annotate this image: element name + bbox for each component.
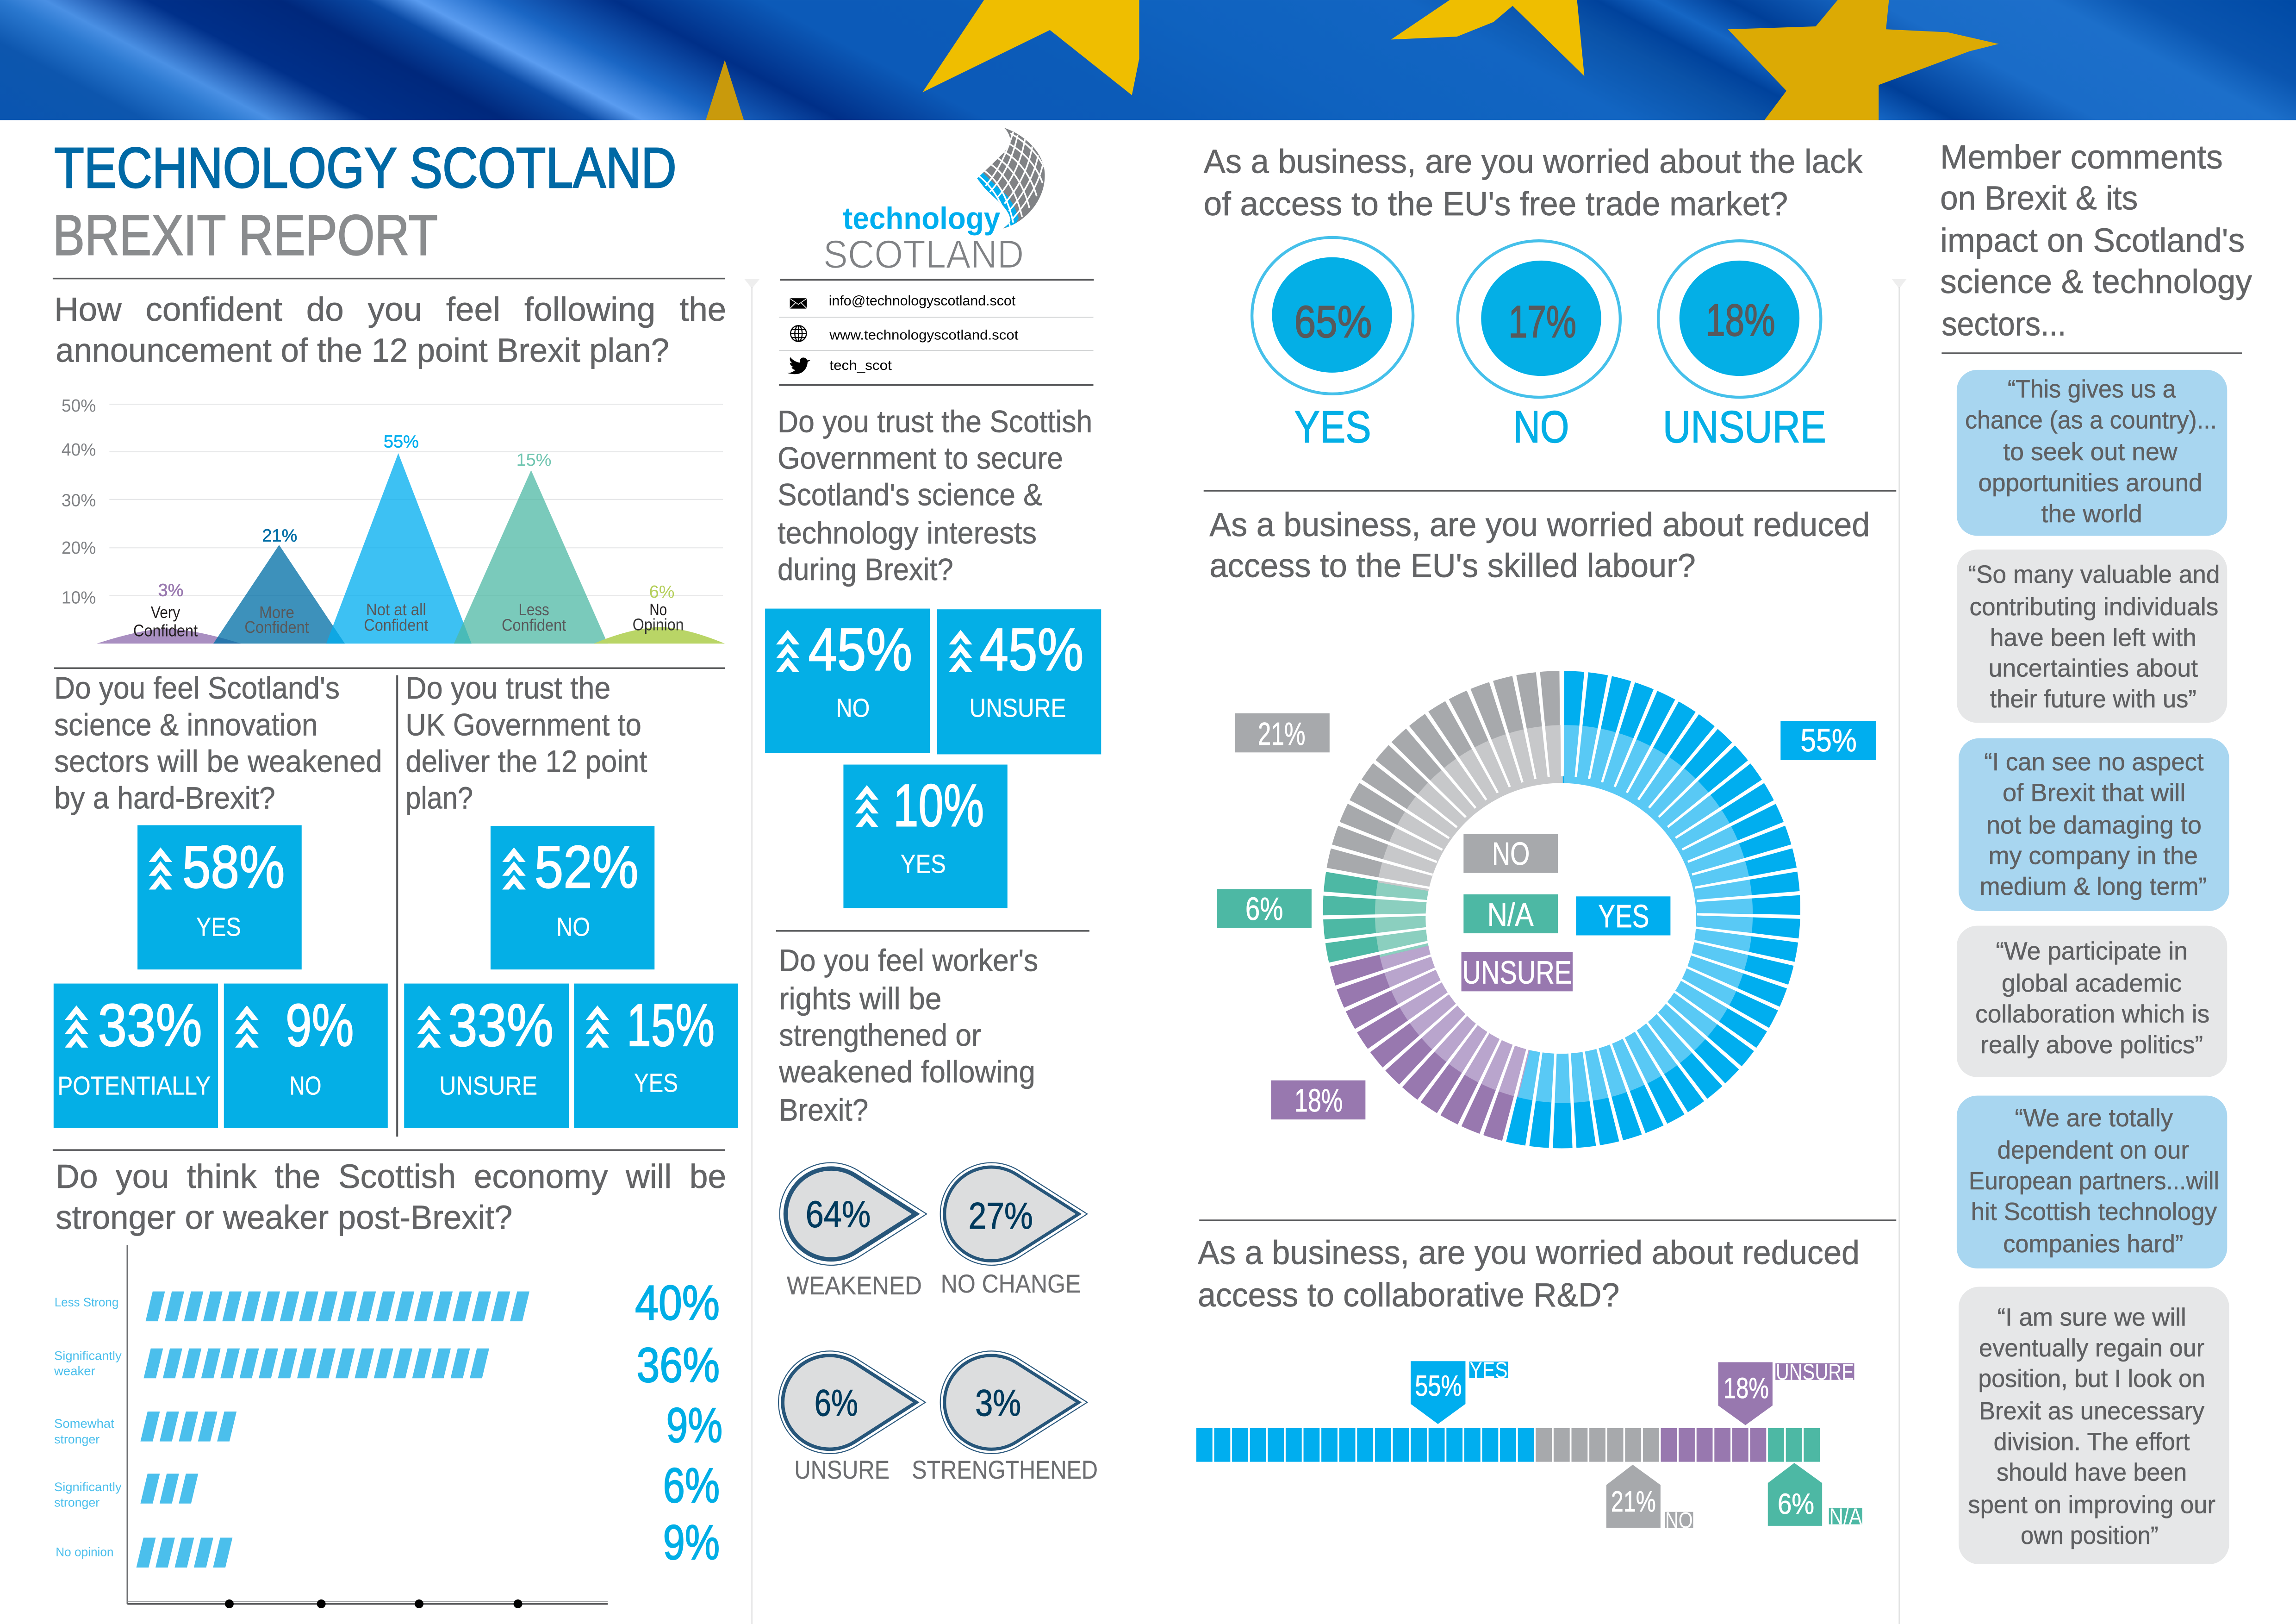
quote: European partners: European partners...will (1969, 1167, 2219, 1195)
chart: confidence triangles: No (649, 600, 667, 619)
heading: UK government question: plan? (405, 781, 473, 815)
chart: striped bars: stronger (54, 1432, 100, 1446)
heading: Scottish Government question: Scotland's science & (778, 478, 1043, 512)
stat: 45% unsure: UNSURE (970, 693, 1066, 723)
stat: 64% weakened: WEAKENED (787, 1271, 922, 1300)
quote: European partners: dependent on our (1997, 1137, 2189, 1164)
chart: confidence triangles (62, 396, 725, 643)
chart: confidence triangles: More (259, 603, 294, 622)
heading: skilled labour question: As a business, are you worried about reduced (1209, 506, 1870, 543)
heading: R&D question: access to collaborative R&D? (1198, 1276, 1619, 1314)
quote: valuable individuals: uncertainties about (1989, 655, 2198, 682)
stat: 17% no: 17% (1508, 296, 1576, 347)
chart: striped bars: No opinion (56, 1545, 114, 1559)
stat: 45% no: NO (836, 693, 870, 723)
icon: globe (790, 325, 806, 342)
stat: 33% potentially: POTENTIALLY (57, 1071, 211, 1101)
quote: global academic collaboration: “We participate in (1996, 937, 2188, 965)
stat: 9% no: NO (290, 1071, 321, 1101)
chart: striped bars: 9% (663, 1515, 720, 1570)
heading: confidence question: announcement of the 12 point Brexit plan? (56, 331, 669, 369)
marker: 18% unsure: 18% (1724, 1372, 1769, 1405)
heading: Scottish Government question: during Brexit? (778, 553, 953, 587)
heading: Scottish Government question: technology interests (778, 516, 1037, 550)
logo: technology scotland (823, 125, 1054, 277)
panel: collaborative R&D question (1196, 1234, 1862, 1533)
quote: chance as a country: chance (as a country)... (1965, 406, 2217, 434)
chart: confidence triangles: 20% (62, 538, 96, 558)
legend: no: NO (1492, 836, 1530, 872)
chart: confidence triangles: Very (151, 603, 180, 622)
chart: confidence triangles: Not at all (366, 600, 426, 619)
heading: economy question (56, 1158, 726, 1237)
heading: Scottish Government question: Government to secure (778, 441, 1063, 475)
quote: eventually regain position: division. The effort (1994, 1428, 2190, 1455)
text: contact lines: info@technologyscotland.scot (829, 294, 1016, 309)
chart: confidence triangles: 40% (62, 440, 96, 460)
heading: workers' rights question (778, 944, 1038, 1127)
quote: valuable individuals (1957, 550, 2227, 723)
quote: valuable individuals: their future with us” (1990, 685, 2196, 713)
heading: R&D question (1198, 1234, 1860, 1314)
stat: 15% yes: YES (634, 1068, 678, 1098)
panel: free trade market question (1204, 143, 1863, 452)
text: contact lines (829, 294, 1019, 373)
heading: workers' rights question: Brexit? (779, 1093, 868, 1127)
heading: member comments: science & technology (1940, 263, 2252, 300)
quote: chance as a country: “This gives us a (2008, 375, 2176, 403)
quote: European partners (1957, 1096, 2227, 1268)
stat: 15% yes: 15% (627, 992, 715, 1059)
stat: 64% weakened: 64% (806, 1193, 871, 1235)
quote: chance as a country: opportunities around (1978, 469, 2203, 497)
quote: eventually regain position: position, but I look on (1978, 1365, 2205, 1393)
quote: no aspect of Brexit: medium & long term” (1980, 873, 2207, 900)
heading: skilled labour question (1209, 506, 1870, 585)
quote: eventually regain position (1959, 1287, 2229, 1564)
stat: 65% yes (1252, 237, 1413, 452)
chart: confidence triangles: 6% (649, 582, 675, 602)
text: contact lines: www.technologyscotland.scot (829, 327, 1019, 343)
quote: no aspect of Brexit: not be damaging to (1986, 811, 2202, 839)
icon: twitter bird (787, 357, 810, 374)
quote: no aspect of Brexit: “I can see no aspect (1984, 748, 2204, 776)
heading: UK government question (405, 671, 647, 815)
heading: economy question: Do you think the Scottish economy will be (56, 1158, 726, 1195)
chart: confidence triangles: 15% (516, 450, 552, 470)
heading: UK government question: Do you trust the (405, 671, 610, 706)
label: 55% (1780, 721, 1876, 760)
marker: 18% unsure (1718, 1360, 1854, 1425)
quote: valuable individuals: “So many valuable and (1968, 561, 2220, 588)
chart: confidence triangles: Opinion (633, 615, 684, 634)
heading: workers' rights question: weakened following (778, 1055, 1035, 1089)
stat: 45% unsure: 45% (980, 616, 1083, 683)
heading: workers' rights question: rights will be (779, 982, 941, 1016)
panel: member comments (1940, 138, 2252, 1564)
panel: skilled labour question (1209, 506, 1876, 1119)
panel: Scottish economy question (54, 1158, 726, 1608)
stat: 3% strengthened (912, 1351, 1098, 1484)
chart: striped bars: Less Strong (55, 1295, 118, 1309)
chart: striped bars: Somewhat (54, 1417, 114, 1430)
legend: n/a (1463, 894, 1558, 933)
stat: 27% no change (940, 1163, 1087, 1298)
marker: 6% n/a: N/A (1829, 1504, 1862, 1529)
stat: 65% yes: YES (1294, 402, 1371, 452)
heading: confidence question: How confident do you feel following the (54, 291, 726, 328)
heading: member comments: sectors... (1941, 306, 2066, 343)
chart: striped bars: stronger (54, 1496, 100, 1510)
stat: 45% no (765, 609, 930, 753)
label: 6% (1217, 889, 1312, 928)
heading: member comments: Member comments (1940, 138, 2223, 176)
marker: 6% n/a (1768, 1463, 1862, 1529)
stat: 3% strengthened: STRENGTHENED (912, 1455, 1098, 1484)
marker: 18% unsure: UNSURE (1776, 1360, 1854, 1385)
stat: 18% unsure: 18% (1706, 295, 1775, 345)
heading: workers' rights question: strengthened or (779, 1018, 981, 1053)
quote: European partners: companies hard” (2003, 1230, 2183, 1258)
chart: striped bars: Significantly (54, 1349, 122, 1362)
label: 6%: 6% (1245, 891, 1283, 927)
stat: 10% yes: 10% (893, 772, 984, 839)
chart: striped bars: 40% (635, 1276, 720, 1330)
heading: member comments (1940, 138, 2252, 343)
chart: striped bars: 36% (636, 1338, 720, 1393)
heading: hard-Brexit question (54, 671, 382, 815)
chart: confidence triangles: 30% (62, 491, 96, 510)
stat: 52% no: 52% (535, 834, 638, 900)
stat: 6% unsure: UNSURE (794, 1455, 890, 1484)
marker: 55% yes: 55% (1415, 1370, 1462, 1402)
heading: economy question: stronger or weaker post-Brexit? (56, 1199, 512, 1237)
stat: 10% yes (843, 765, 1008, 908)
label: 55%: 55% (1800, 722, 1857, 758)
heading: hard-Brexit question: science & innovation (54, 708, 318, 742)
stat: 58% yes: 58% (182, 834, 285, 900)
stat: 27% no change: 27% (969, 1195, 1033, 1237)
heading: member comments: impact on Scotland's (1940, 222, 2245, 259)
stat: 27% no change: NO CHANGE (941, 1269, 1081, 1298)
label: 18%: 18% (1294, 1082, 1343, 1118)
heading: free trade question: As a business, are you worried about the lack (1204, 143, 1863, 180)
quote: valuable individuals: have been left with (1990, 624, 2196, 651)
legend: unsure: UNSURE (1462, 955, 1572, 991)
stat: 9% no (224, 984, 388, 1128)
stat: 10% yes: YES (901, 849, 946, 879)
chart: confidence triangles: 3% (158, 581, 183, 600)
heading: free trade question (1204, 143, 1863, 223)
chart: confidence triangles: 50% (62, 396, 96, 416)
quote: chance as a country (1957, 370, 2227, 536)
quote: no aspect of Brexit: of Brexit that will (2003, 779, 2185, 807)
stat: 52% no: NO (556, 912, 590, 942)
heading: member comments: on Brexit & its (1940, 179, 2138, 217)
panel: contact details (779, 279, 1094, 386)
quote: eventually regain position: own position” (2021, 1522, 2159, 1549)
quote: global academic collaboration: global academic (2002, 969, 2182, 997)
heading: hard-Brexit question: Do you feel Scotland's (54, 671, 340, 706)
stat: 58% yes (137, 825, 302, 969)
stat: 9% no: 9% (286, 992, 354, 1059)
chart: confidence triangles: 21% (262, 526, 297, 545)
quote: eventually regain position: should have been (1997, 1459, 2187, 1487)
logo: technology scotland: SCOTLAND (823, 233, 1024, 277)
text: contact lines: tech_scot (829, 358, 892, 373)
quote: chance as a country: the world (2041, 500, 2142, 528)
marker: 21% no: 21% (1611, 1486, 1656, 1518)
marker: 55% yes: YES (1469, 1358, 1508, 1383)
heading: UK government question: deliver the 12 point (405, 744, 647, 779)
chart: confidence triangles: Confident (364, 616, 428, 635)
stat: 3% strengthened: 3% (975, 1382, 1021, 1424)
quote: European partners: hit Scottish technology (1971, 1198, 2217, 1226)
chart: striped bars: 6% (663, 1458, 720, 1513)
heading: hard-Brexit question: sectors will be weakened (54, 744, 382, 779)
chart: segmented bar (1196, 1358, 1862, 1533)
title: TECHNOLOGY SCOTLAND (54, 136, 677, 200)
chart: striped bars (54, 1245, 722, 1608)
logo: technology scotland: technology (843, 202, 1000, 236)
stat: 6% unsure: 6% (815, 1382, 858, 1424)
chart: striped bars: weaker (54, 1364, 95, 1378)
quote: eventually regain position: spent on improving our (1968, 1491, 2215, 1518)
legend: no (1463, 834, 1558, 873)
title (53, 136, 677, 268)
stat: 33% potentially: 33% (98, 992, 202, 1059)
stat: 15% yes (574, 984, 738, 1128)
label: 18% (1271, 1081, 1365, 1119)
quote: European partners: “We are totally (2015, 1104, 2173, 1132)
quote: global academic collaboration (1957, 926, 2227, 1077)
stat: 64% weakened (780, 1163, 927, 1300)
stat: 45% no: 45% (808, 616, 912, 683)
panel: confidence question (54, 291, 726, 643)
quote: global academic collaboration: collaboration which is (1975, 1000, 2209, 1028)
quote: eventually regain position: Brexit as unecessary (1979, 1397, 2204, 1425)
heading: free trade question: of access to the EU's free trade market? (1204, 185, 1788, 223)
chart: confidence triangles: Confident (244, 618, 309, 637)
stat: 52% no (491, 826, 654, 969)
panel: UK government trust question (404, 671, 738, 1128)
quote: valuable individuals: contributing individuals (1969, 593, 2218, 621)
heading: workers' rights question: Do you feel worker's (779, 944, 1038, 978)
chart: confidence triangles: Less (518, 600, 549, 619)
label: 21% (1235, 713, 1330, 752)
heading: R&D question: As a business, are you worried about reduced (1198, 1234, 1860, 1271)
chart: confidence triangles: Confident (502, 616, 566, 635)
stat: 65% yes: 65% (1294, 296, 1372, 347)
marker: 6% n/a: 6% (1778, 1488, 1814, 1520)
stat: 33% potentially (54, 984, 218, 1128)
stat: 33% unsure: UNSURE (439, 1071, 537, 1101)
stat: 58% yes: YES (196, 912, 241, 942)
heading: confidence question (54, 291, 726, 369)
stat: 33% unsure: 33% (448, 992, 554, 1059)
stat: 33% unsure (404, 984, 569, 1128)
panel: science and innovation question (54, 671, 388, 1128)
chart: radial donut (1217, 713, 1876, 1119)
banner: EU flag (0, 0, 2296, 120)
quote: global academic collaboration: really above politics” (1980, 1031, 2203, 1059)
icon: globe mark (977, 128, 1045, 229)
heading: Scottish Government question: Do you trust the Scottish (778, 405, 1092, 439)
quote: chance as a country: to seek out new (2003, 438, 2178, 466)
panel: workers' rights question (778, 944, 1098, 1484)
marker: 21% no: NO (1665, 1508, 1693, 1533)
heading: Scottish Government question (778, 405, 1092, 587)
legend: n/a: N/A (1487, 897, 1534, 933)
legend: yes (1576, 896, 1670, 935)
stat: 18% unsure (1658, 241, 1826, 452)
heading: UK government question: UK Government to (405, 708, 641, 742)
quote: no aspect of Brexit (1959, 738, 2229, 911)
stat: 17% no: NO (1513, 402, 1569, 452)
chart: confidence triangles: 55% (384, 432, 419, 452)
chart: confidence triangles: 10% (62, 588, 96, 608)
quote: no aspect of Brexit: my company in the (1989, 842, 2198, 870)
chart: striped bars: Significantly (54, 1480, 122, 1494)
stat: 17% no (1458, 241, 1620, 452)
stat: 45% unsure (937, 609, 1101, 754)
marker: 55% yes (1411, 1358, 1508, 1424)
stat: 6% unsure (778, 1351, 926, 1484)
quote: eventually regain position: eventually regain our (1979, 1334, 2204, 1362)
legend: yes: YES (1598, 898, 1649, 934)
chart: striped bars: 9% (666, 1398, 722, 1453)
panel: Scottish Government trust question (765, 405, 1101, 908)
label: 21%: 21% (1258, 716, 1306, 752)
marker: 21% no (1606, 1465, 1693, 1533)
title: BREXIT REPORT (53, 204, 438, 268)
chart: confidence triangles: Confident (133, 621, 198, 640)
icon: envelope (790, 298, 807, 309)
stat: 18% unsure: UNSURE (1663, 402, 1826, 452)
heading: skilled labour question: access to the EU's skilled labour? (1209, 547, 1696, 585)
quote: eventually regain position: “I am sure we will (1997, 1303, 2186, 1331)
heading: hard-Brexit question: by a hard-Brexit? (54, 781, 275, 815)
